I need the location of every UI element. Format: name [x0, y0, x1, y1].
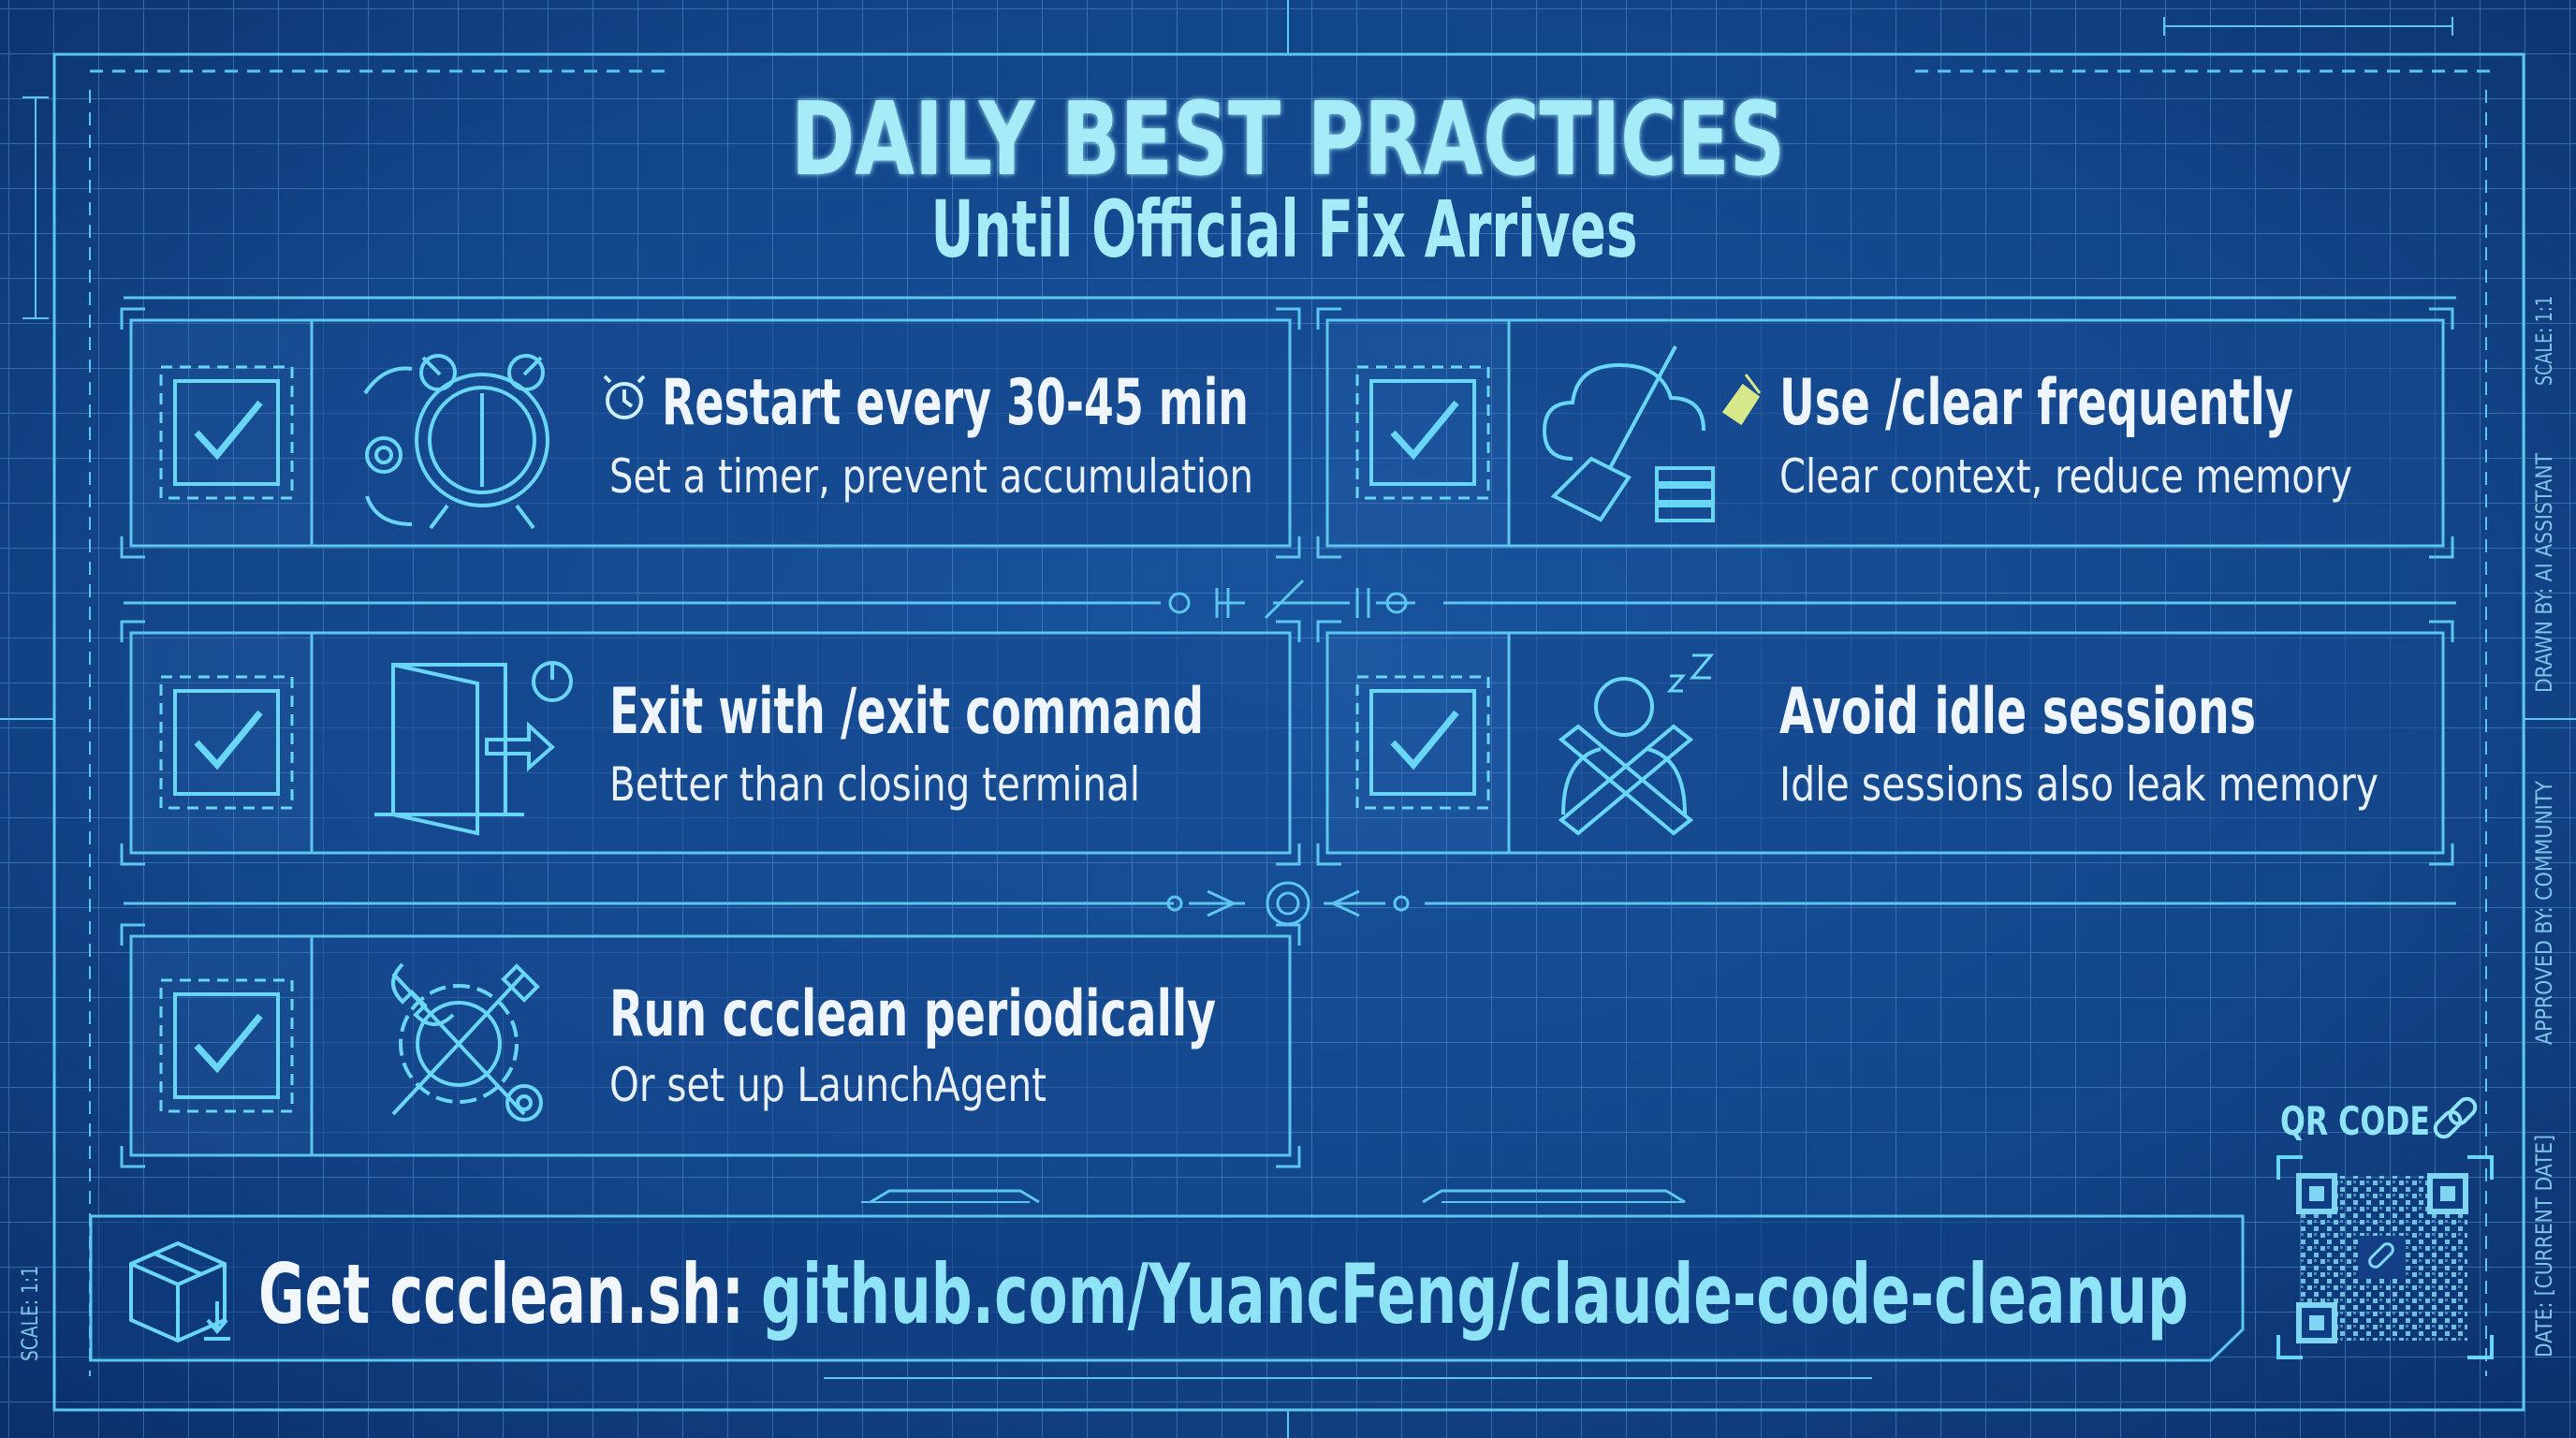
- QR code: QR CODE: [2280, 1098, 2430, 1144]
- checkbox: [161, 677, 292, 808]
- icon: cloud broom: [1544, 346, 1713, 521]
- url text: Get ccclean.sh:: [258, 1246, 744, 1343]
- connector row 1-2: [124, 580, 2456, 618]
- url text: github.com/YuancFeng/claude-code-cleanup: [761, 1246, 2188, 1343]
- panel: ccclean: [122, 925, 1299, 1167]
- right side labels: APPROVED BY: COMMUNITY: [2531, 780, 2557, 1045]
- icon: idle user crossed: [1561, 655, 1711, 833]
- checkbox: [161, 367, 292, 498]
- subtext: Or set up LaunchAgent: [609, 1058, 1046, 1112]
- panel: exit: [122, 622, 1299, 864]
- icon: door exit: [374, 663, 571, 833]
- subtext: Idle sessions also leak memory: [1779, 757, 2378, 812]
- panel: idle: [1318, 622, 2452, 864]
- heading: Exit with /exit command: [609, 675, 1204, 749]
- heading: Avoid idle sessions: [1779, 675, 2256, 749]
- icon: tools gear: [393, 964, 541, 1120]
- right side labels: [17, 296, 2557, 1361]
- icon: alarm clock: [365, 356, 548, 528]
- QR code: [2278, 1095, 2492, 1357]
- heading: [1724, 374, 1760, 423]
- url banner: [91, 1191, 2243, 1378]
- right side labels: SCALE: 1:1: [17, 1266, 43, 1361]
- icon: package download: [131, 1243, 230, 1341]
- panel: clear: [1318, 309, 2452, 557]
- checkbox: [1357, 367, 1488, 498]
- right side labels: DRAWN BY: AI ASSISTANT: [2531, 452, 2557, 693]
- right side labels: SCALE: 1:1: [2531, 296, 2557, 386]
- checkbox: [161, 980, 292, 1111]
- panel: restart: Restart every 30-45 min: [662, 366, 1249, 440]
- heading: Run ccclean periodically: [609, 977, 1216, 1051]
- title: DAILY BEST PRACTICES: [791, 81, 1785, 198]
- connector row 2-3: [124, 883, 2456, 924]
- subtitle: Until Official Fix Arrives: [930, 183, 1638, 275]
- subtext: Better than closing terminal: [609, 757, 1140, 812]
- checkbox: [1357, 677, 1488, 808]
- subtext: Set a timer, prevent accumulation: [609, 449, 1253, 504]
- panel: clear: Use /clear frequently: [1779, 366, 2293, 440]
- right side labels: DATE: [CURRENT DATE]: [2531, 1135, 2557, 1357]
- subtext: Clear context, reduce memory: [1779, 449, 2352, 504]
- heading: [605, 376, 644, 418]
- panel: restart: [122, 309, 1299, 557]
